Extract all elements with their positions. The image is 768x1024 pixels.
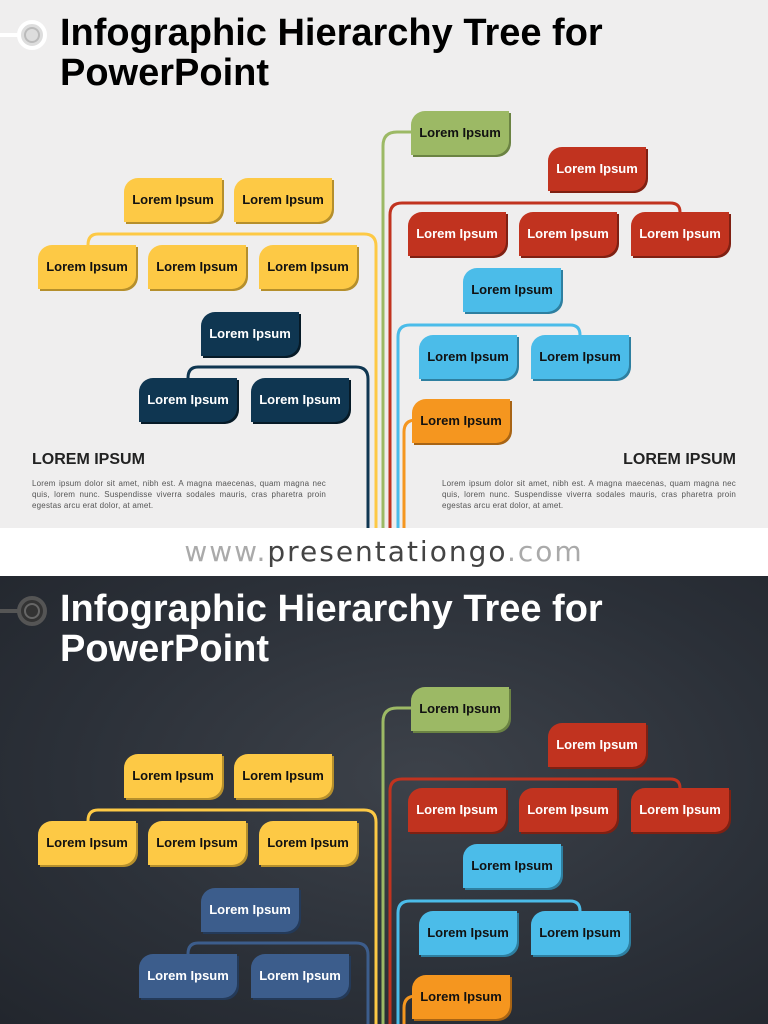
red group: Lorem Ipsum — [527, 226, 609, 241]
footer: website: www.presentationgo.com — [184, 535, 584, 568]
orange box: Lorem Ipsum — [420, 413, 502, 428]
green box dark — [411, 687, 509, 731]
green box dark: Lorem Ipsum — [419, 701, 501, 716]
text block left — [32, 451, 326, 510]
navy group: Lorem Ipsum — [259, 392, 341, 407]
blue group — [419, 268, 631, 381]
blue group dark: Lorem Ipsum — [427, 925, 509, 940]
text block right: Lorem ipsum dolor sit amet, nibh est. A magna maecenas, quam magna nec quis, lorem nunc. Suspendisse viverra sodales mauris, cras pharetra proin egestas arcu erat dolor, at amet. — [442, 479, 736, 510]
red group: Lorem Ipsum — [416, 226, 498, 241]
yellow group dark: Lorem Ipsum — [156, 835, 238, 850]
red group — [408, 147, 731, 258]
panel: dark version — [0, 576, 768, 1024]
navy group dark — [139, 888, 351, 1000]
green box — [411, 111, 509, 155]
navy group dark: Lorem Ipsum — [259, 968, 341, 983]
title dark: PowerPoint — [60, 628, 269, 670]
navy group: Lorem Ipsum — [147, 392, 229, 407]
text block right — [442, 451, 736, 510]
yellow group dark: Lorem Ipsum — [267, 835, 349, 850]
yellow group: Lorem Ipsum — [46, 259, 128, 274]
blue group: Lorem Ipsum — [427, 349, 509, 364]
yellow group dark: Lorem Ipsum — [46, 835, 128, 850]
navy group — [139, 312, 351, 424]
yellow group dark — [38, 754, 359, 867]
text block left: LOREM IPSUM — [32, 451, 145, 468]
blue group: Lorem Ipsum — [471, 282, 553, 297]
yellow group — [38, 178, 359, 291]
title dark — [60, 588, 603, 670]
yellow group: Lorem Ipsum — [242, 192, 324, 207]
blue group: Lorem Ipsum — [539, 349, 621, 364]
red group: Lorem Ipsum — [556, 161, 638, 176]
icon: title ring — [0, 20, 47, 50]
yellow group: Lorem Ipsum — [132, 192, 214, 207]
red group: Lorem Ipsum — [639, 226, 721, 241]
yellow group: Lorem Ipsum — [267, 259, 349, 274]
navy group: Lorem Ipsum — [209, 326, 291, 341]
yellow group dark: Lorem Ipsum — [242, 768, 324, 783]
orange box dark — [412, 975, 510, 1019]
text block right: LOREM IPSUM — [623, 451, 736, 468]
blue group dark: Lorem Ipsum — [471, 858, 553, 873]
navy group dark: Lorem Ipsum — [147, 968, 229, 983]
connector lines dark — [86, 706, 682, 1024]
red group dark: Lorem Ipsum — [556, 737, 638, 752]
text block left: Lorem ipsum dolor sit amet, nibh est. A magna maecenas, quam magna nec quis, lorem nunc. Suspendisse viverra sodales mauris, cras pharetra proin egestas arcu erat dolor, at amet. — [32, 479, 326, 510]
red group dark: Lorem Ipsum — [416, 802, 498, 817]
red group dark — [408, 723, 731, 834]
footer: website — [0, 528, 768, 576]
title dark: Infographic Hierarchy Tree for — [60, 588, 603, 630]
panel: light version — [0, 0, 768, 528]
blue group dark — [419, 844, 631, 957]
red group dark: Lorem Ipsum — [527, 802, 609, 817]
yellow group dark: Lorem Ipsum — [132, 768, 214, 783]
title: PowerPoint — [60, 52, 269, 94]
icon: title ring dark — [0, 596, 47, 626]
orange box — [412, 399, 510, 443]
title: Infographic Hierarchy Tree for — [60, 12, 603, 54]
blue group dark: Lorem Ipsum — [539, 925, 621, 940]
title — [60, 12, 603, 94]
navy group dark: Lorem Ipsum — [209, 902, 291, 917]
yellow group: Lorem Ipsum — [156, 259, 238, 274]
green box: Lorem Ipsum — [419, 125, 501, 140]
connector lines — [86, 130, 682, 528]
orange box dark: Lorem Ipsum — [420, 989, 502, 1004]
red group dark: Lorem Ipsum — [639, 802, 721, 817]
